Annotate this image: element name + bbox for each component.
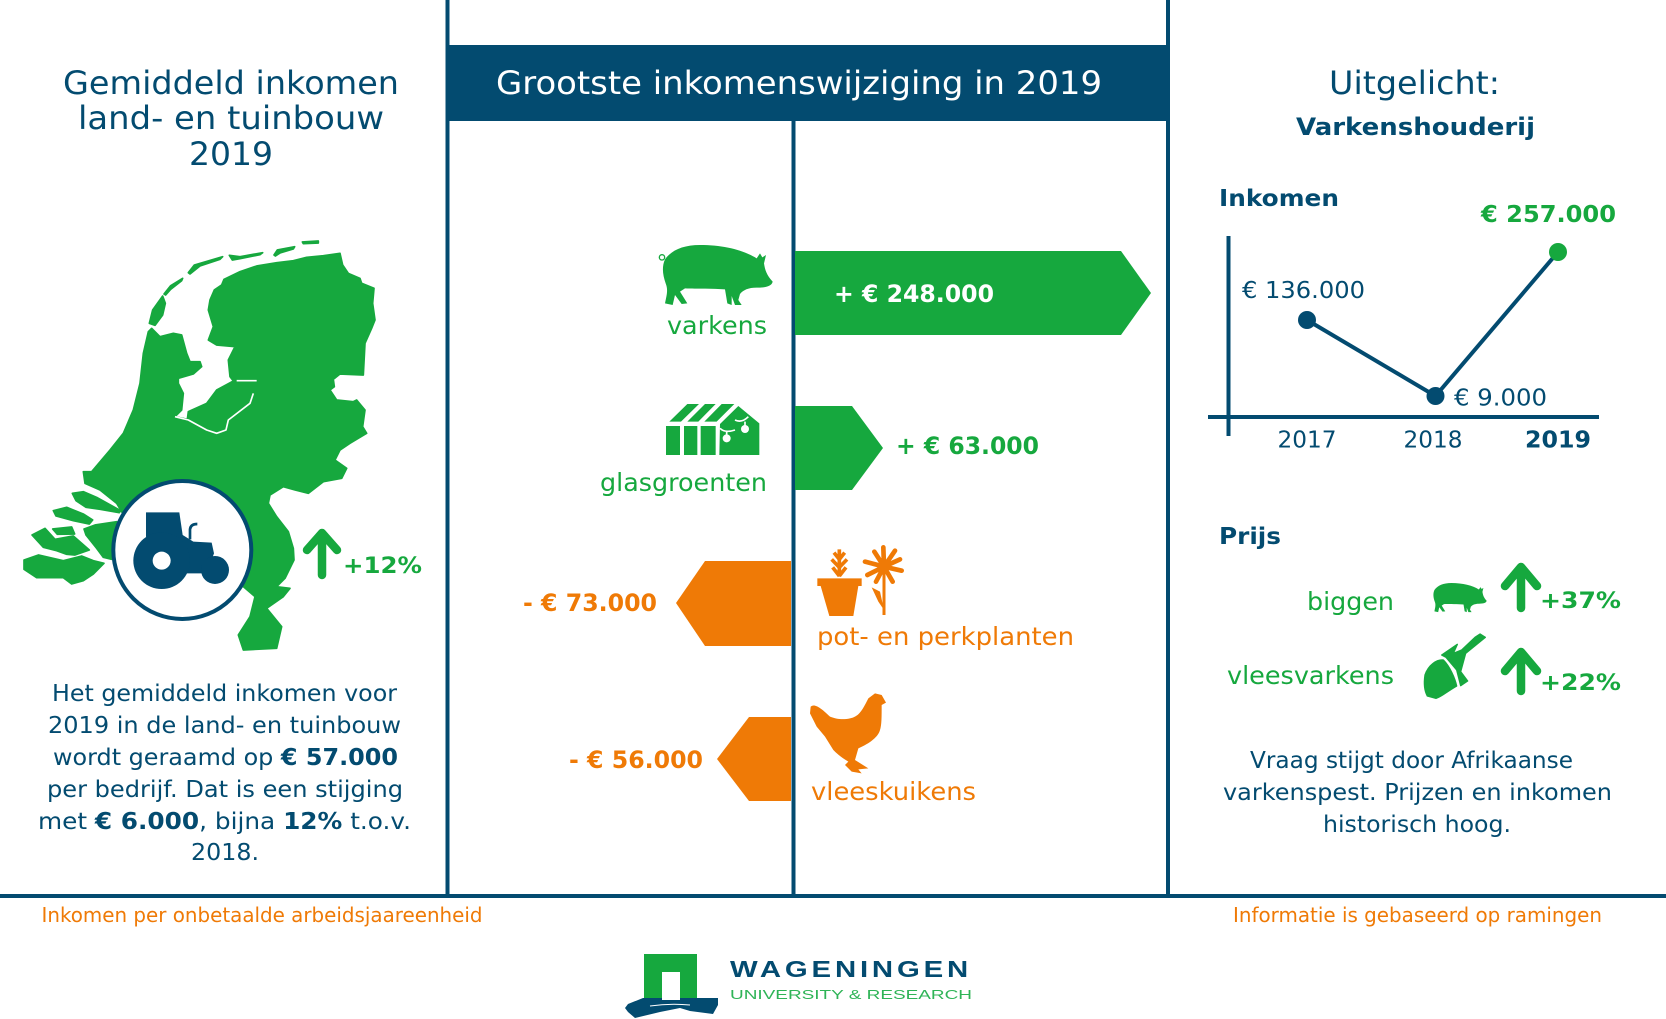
text block: income explanation: Het gemiddeld inkomen voor (52, 679, 397, 707)
row: vleesvarkens: vleesvarkens (1227, 661, 1394, 690)
panel: national average income (24, 64, 422, 866)
line chart: income (1208, 186, 1616, 454)
icon: pot plant and flower (817, 547, 902, 616)
row: glasgroenten (600, 404, 1039, 497)
row: varkens (659, 245, 1151, 340)
icon: up arrow with +12% (307, 533, 422, 579)
footnote: left: Inkomen per onbetaalde arbeidsjaareenheid (42, 903, 482, 927)
line chart: income: 2018 (1404, 428, 1462, 454)
bar: -73.000: - € 73.000 (523, 589, 657, 617)
bar: +248.000: + € 248.000 (834, 280, 994, 308)
panel: largest income change (447, 45, 1170, 806)
heading: right (1296, 64, 1535, 141)
panel: pig farming highlight (1208, 64, 1621, 838)
text block: pig farming explanation: historisch hoog. (1323, 810, 1511, 838)
icon: small pig (1433, 583, 1487, 612)
footnote: right: Informatie is gebaseerd op ramingen (1233, 903, 1602, 927)
row: pot- en perkplanten (523, 547, 1074, 651)
row: varkens: varkens (667, 311, 767, 340)
row: biggen: biggen (1307, 587, 1394, 616)
heading: left: 2019 (189, 135, 273, 173)
line chart: income: € 136.000 (1242, 278, 1365, 304)
line chart: income: € 9.000 (1454, 386, 1547, 412)
icon: greenhouse (666, 404, 759, 455)
icon: pork cut (1424, 634, 1485, 698)
line chart: income: 2019 (1525, 428, 1591, 454)
bar: -73.000 (523, 561, 791, 646)
icon: chicken (810, 693, 886, 773)
text block: income explanation: wordt geraamd op € 57.000 (53, 743, 398, 771)
row: glasgroenten: glasgroenten (600, 468, 767, 497)
logo: Wageningen University & Research: UNIVERSITY & RESEARCH (730, 988, 972, 1002)
heading: right: Varkenshouderij (1296, 113, 1535, 141)
bar: -56.000 (569, 717, 791, 801)
icon: pig (659, 245, 773, 305)
heading: left: Gemiddeld inkomen (63, 64, 399, 102)
map of the Netherlands (24, 241, 375, 650)
text block: pig farming explanation: varkenspest. Prijzen en inkomen (1223, 778, 1612, 806)
row: vleeskuikens: vleeskuikens (811, 777, 976, 806)
bar: +63.000: + € 63.000 (896, 432, 1039, 460)
row: biggen (1307, 567, 1621, 616)
text block: income explanation: 2018. (191, 838, 259, 866)
text block: pig farming explanation (1223, 746, 1612, 838)
text block: income explanation: 2019 in de land- en tuinbouw (48, 711, 401, 739)
text block: income explanation: met € 6.000, bijna 12% t.o.v. (38, 807, 411, 835)
row: pot- en perkplanten: pot- en perkplanten (817, 622, 1074, 651)
heading: right: Uitgelicht: (1329, 64, 1500, 102)
row: vleeskuikens (569, 693, 976, 806)
heading band (447, 45, 1170, 121)
row: biggen: +37% (1540, 589, 1621, 614)
price section (1219, 524, 1621, 698)
row: vleesvarkens: +22% (1540, 671, 1621, 696)
heading: left: land- en tuinbouw (78, 99, 384, 137)
heading: left (63, 64, 399, 173)
text block: pig farming explanation: Vraag stijgt door Afrikaanse (1250, 746, 1573, 774)
bar: -56.000: - € 56.000 (569, 746, 703, 774)
logo: Wageningen University & Research: WAGENINGEN (730, 956, 972, 982)
icon: up arrow with +12%: +12% (343, 554, 422, 579)
heading band: Grootste inkomenswijziging in 2019 (496, 64, 1102, 102)
bar: +63.000 (795, 406, 1039, 490)
line chart: income: Inkomen (1219, 186, 1339, 212)
line chart: income: 2017 (1278, 428, 1336, 454)
text block: income explanation: per bedrijf. Dat is een stijging (47, 775, 403, 803)
bar: +248.000 (795, 251, 1151, 335)
line chart: income: € 257.000 (1480, 202, 1616, 228)
price section: Prijs (1219, 524, 1281, 550)
row: vleesvarkens (1227, 634, 1621, 698)
text block: income explanation (38, 679, 411, 866)
logo: Wageningen University & Research (625, 954, 972, 1018)
icon: tractor in circle (113, 481, 251, 619)
